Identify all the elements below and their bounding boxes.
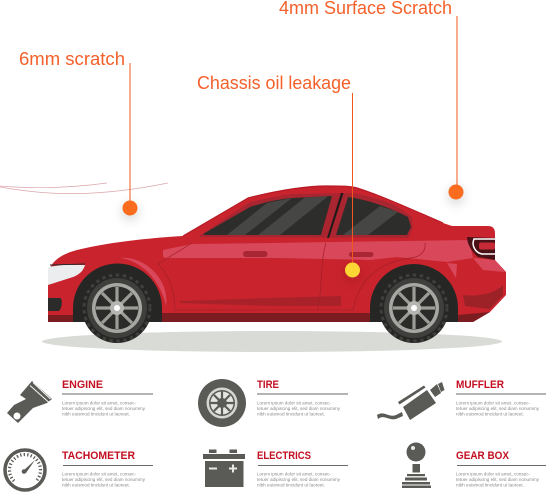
rear wheel arch	[370, 264, 458, 322]
item: gear box: tetuer adipiscing elit, sed diam nonummy	[456, 477, 540, 482]
item: tachometer: TACHOMETER	[62, 450, 135, 462]
front arch highlight	[121, 258, 166, 306]
item: tire	[257, 379, 348, 416]
item: tire: Lorem ipsum dolor sit amet, consec-	[257, 400, 331, 406]
item: gear box: nibh euismod tincidunt ut laoreet.	[456, 482, 524, 488]
item: engine: Lorem ipsum dolor sit amet, consec-	[62, 400, 136, 406]
front window	[203, 196, 332, 235]
lower sill	[161, 313, 371, 322]
callout: chassis oil leakage: Chassis oil leakage	[197, 72, 351, 93]
tail light	[467, 237, 495, 260]
front window reflections	[227, 196, 328, 235]
icon: battery	[203, 450, 245, 487]
door pillar	[327, 193, 344, 238]
front wheel	[82, 273, 152, 343]
item: muffler: tetuer adipiscing elit, sed diam nonummy	[456, 406, 540, 411]
item: muffler: Lorem ipsum dolor sit amet, consec-	[456, 400, 530, 406]
icon: gear box	[402, 442, 431, 488]
door handle rear	[349, 252, 374, 257]
car illustration	[48, 186, 506, 343]
door seams	[158, 243, 425, 310]
headlight	[48, 265, 85, 285]
item: muffler: nibh euismod tincidunt ut laoreet.	[456, 412, 524, 416]
rear window reflections	[343, 206, 398, 235]
rear lower lip	[458, 312, 490, 322]
front wheel arch	[73, 264, 162, 322]
rear wheel	[379, 273, 449, 343]
scratch marks	[0, 183, 168, 194]
callout: 6mm scratch	[19, 48, 138, 219]
item: gear box	[456, 450, 546, 488]
car body	[48, 186, 506, 322]
item: electrics: Lorem ipsum dolor sit amet, consec-	[257, 472, 331, 476]
item: electrics	[257, 450, 348, 488]
headlight rim	[50, 264, 85, 265]
ground shadow	[42, 331, 502, 352]
rear bumper shade	[463, 285, 503, 309]
door handle front	[243, 251, 268, 257]
light side stripe	[163, 240, 473, 262]
item: tachometer	[62, 450, 153, 488]
item: engine: ENGINE	[62, 379, 103, 391]
item: gear box: Lorem ipsum dolor sit amet, consec-	[456, 472, 530, 476]
item: engine: tetuer adipiscing elit, sed diam nonummy	[62, 406, 146, 411]
item: electrics: tetuer adipiscing elit, sed diam nonummy	[257, 477, 341, 482]
icon: tachometer	[5, 450, 45, 490]
item: muffler: MUFFLER	[456, 379, 504, 391]
window surround	[198, 193, 413, 238]
callout: chassis oil leakage	[197, 72, 360, 281]
rear window	[336, 197, 411, 235]
item: electrics: ELECTRICS	[257, 450, 311, 462]
item: tachometer: nibh euismod tincidunt ut laoreet.	[62, 482, 130, 488]
item: gear box: GEAR BOX	[456, 450, 510, 462]
icon: muffler	[377, 382, 444, 420]
item: electrics: nibh euismod tincidunt ut laoreet.	[257, 482, 325, 488]
front lower lip	[48, 315, 75, 322]
icon: tire	[198, 379, 246, 427]
item: tachometer: Lorem ipsum dolor sit amet, consec-	[62, 472, 136, 476]
roof edge highlight	[183, 186, 443, 236]
item: tire: nibh euismod tincidunt ut laoreet.	[257, 412, 325, 416]
rear quarter highlight	[473, 258, 505, 272]
icon: engine piston	[7, 381, 52, 423]
item: tachometer: tetuer adipiscing elit, sed diam nonummy	[62, 477, 146, 482]
item: tire: tetuer adipiscing elit, sed diam nonummy	[257, 406, 341, 411]
item: tire: TIRE	[257, 379, 279, 391]
front grille	[48, 298, 62, 311]
callout: 6mm scratch: 6mm scratch	[19, 48, 125, 69]
item: muffler	[456, 379, 546, 416]
callout: 4mm surface scratch	[279, 0, 464, 203]
item: engine: nibh euismod tincidunt ut laoreet.	[62, 412, 130, 416]
rear arch highlight	[447, 263, 457, 278]
side sill shade	[180, 296, 341, 306]
item: engine	[62, 379, 153, 416]
